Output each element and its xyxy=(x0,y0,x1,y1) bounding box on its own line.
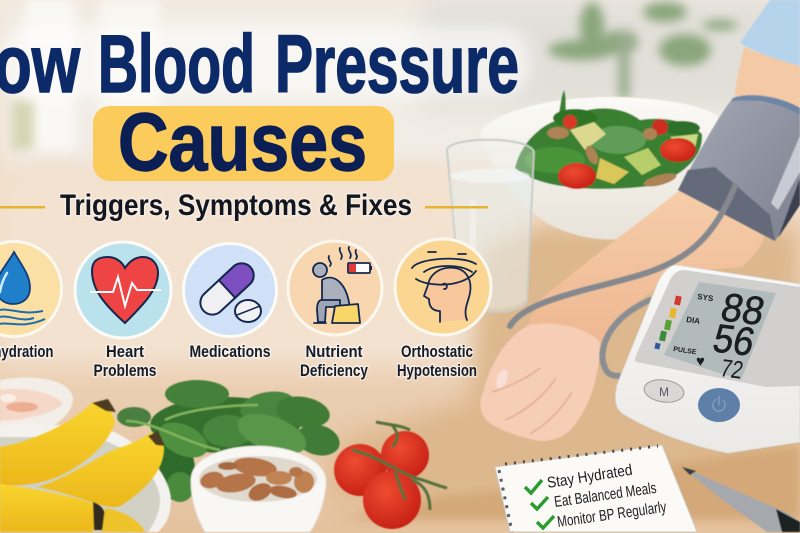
readings: ♥ xyxy=(696,353,705,370)
label xyxy=(94,343,156,380)
label: Hypotension xyxy=(397,362,477,380)
checklist xyxy=(525,462,668,531)
background plant xyxy=(548,2,738,98)
notepad xyxy=(495,445,697,532)
spinach leaves xyxy=(117,380,343,502)
checklist: Monitor BP Regularly xyxy=(556,499,668,531)
M button: M xyxy=(659,385,669,399)
white plate xyxy=(0,425,171,532)
label: Heart xyxy=(106,343,144,361)
almond bowl xyxy=(191,446,326,532)
cause: Orthostatic Hypotension xyxy=(395,239,491,380)
forearm xyxy=(524,190,764,348)
icon: dizzy head xyxy=(395,239,491,335)
readings: 88 xyxy=(717,286,769,334)
spiral binding xyxy=(505,446,658,464)
blue sleeve xyxy=(740,0,800,68)
upper arm xyxy=(735,47,800,110)
checklist: Stay Hydrated xyxy=(546,462,634,492)
LCD screen xyxy=(664,282,776,380)
water glass xyxy=(447,140,534,312)
cherry tomatoes xyxy=(334,422,447,529)
M button xyxy=(643,377,685,405)
arm and hand xyxy=(480,0,800,441)
salad bowl xyxy=(480,90,718,240)
cause: Heart Problems xyxy=(75,242,171,380)
readings: SYS xyxy=(697,292,714,303)
tomatoes xyxy=(558,163,596,189)
title: Blood xyxy=(98,19,255,110)
subtitle: Triggers, Symptoms & Fixes xyxy=(60,189,412,222)
grey face panel xyxy=(635,270,800,387)
cause: Nutrient Deficiency xyxy=(288,241,382,380)
icon: capsule and tablet xyxy=(184,244,276,336)
readings: PULSE xyxy=(673,346,697,356)
icon: tired person with low battery xyxy=(288,241,382,335)
cause: Medications: Medications xyxy=(190,343,270,361)
avocado xyxy=(570,122,606,150)
readings: 72 xyxy=(718,355,746,385)
salad greens xyxy=(515,90,702,189)
cause: Medications xyxy=(184,244,276,361)
cuff tube xyxy=(510,186,735,376)
checklist: Eat Balanced Meals xyxy=(553,480,658,511)
cause: Dehydration xyxy=(0,242,62,361)
salt bowl xyxy=(0,377,73,440)
readings: DIA xyxy=(686,315,701,326)
label: Orthostatic xyxy=(401,343,473,361)
label: Deficiency xyxy=(300,362,369,380)
subtitle pill: Causes: Causes xyxy=(118,97,367,188)
label xyxy=(300,343,369,380)
colour scale xyxy=(654,295,682,350)
label: Problems xyxy=(94,362,156,380)
title xyxy=(0,19,530,110)
bananas xyxy=(0,399,165,532)
monitor body xyxy=(616,265,800,453)
readings xyxy=(673,286,769,385)
icon: heart with pulse xyxy=(75,242,171,338)
power button xyxy=(698,388,740,422)
readings: 56 xyxy=(709,317,759,365)
pen xyxy=(682,467,800,532)
label: Nutrient xyxy=(306,343,363,361)
blood pressure monitor xyxy=(616,265,800,453)
icon: water drop xyxy=(0,242,62,336)
title: Pressure xyxy=(275,19,519,110)
label xyxy=(397,343,477,380)
blood pressure cuff xyxy=(678,95,800,241)
walnuts xyxy=(547,127,678,189)
hand xyxy=(480,324,600,441)
